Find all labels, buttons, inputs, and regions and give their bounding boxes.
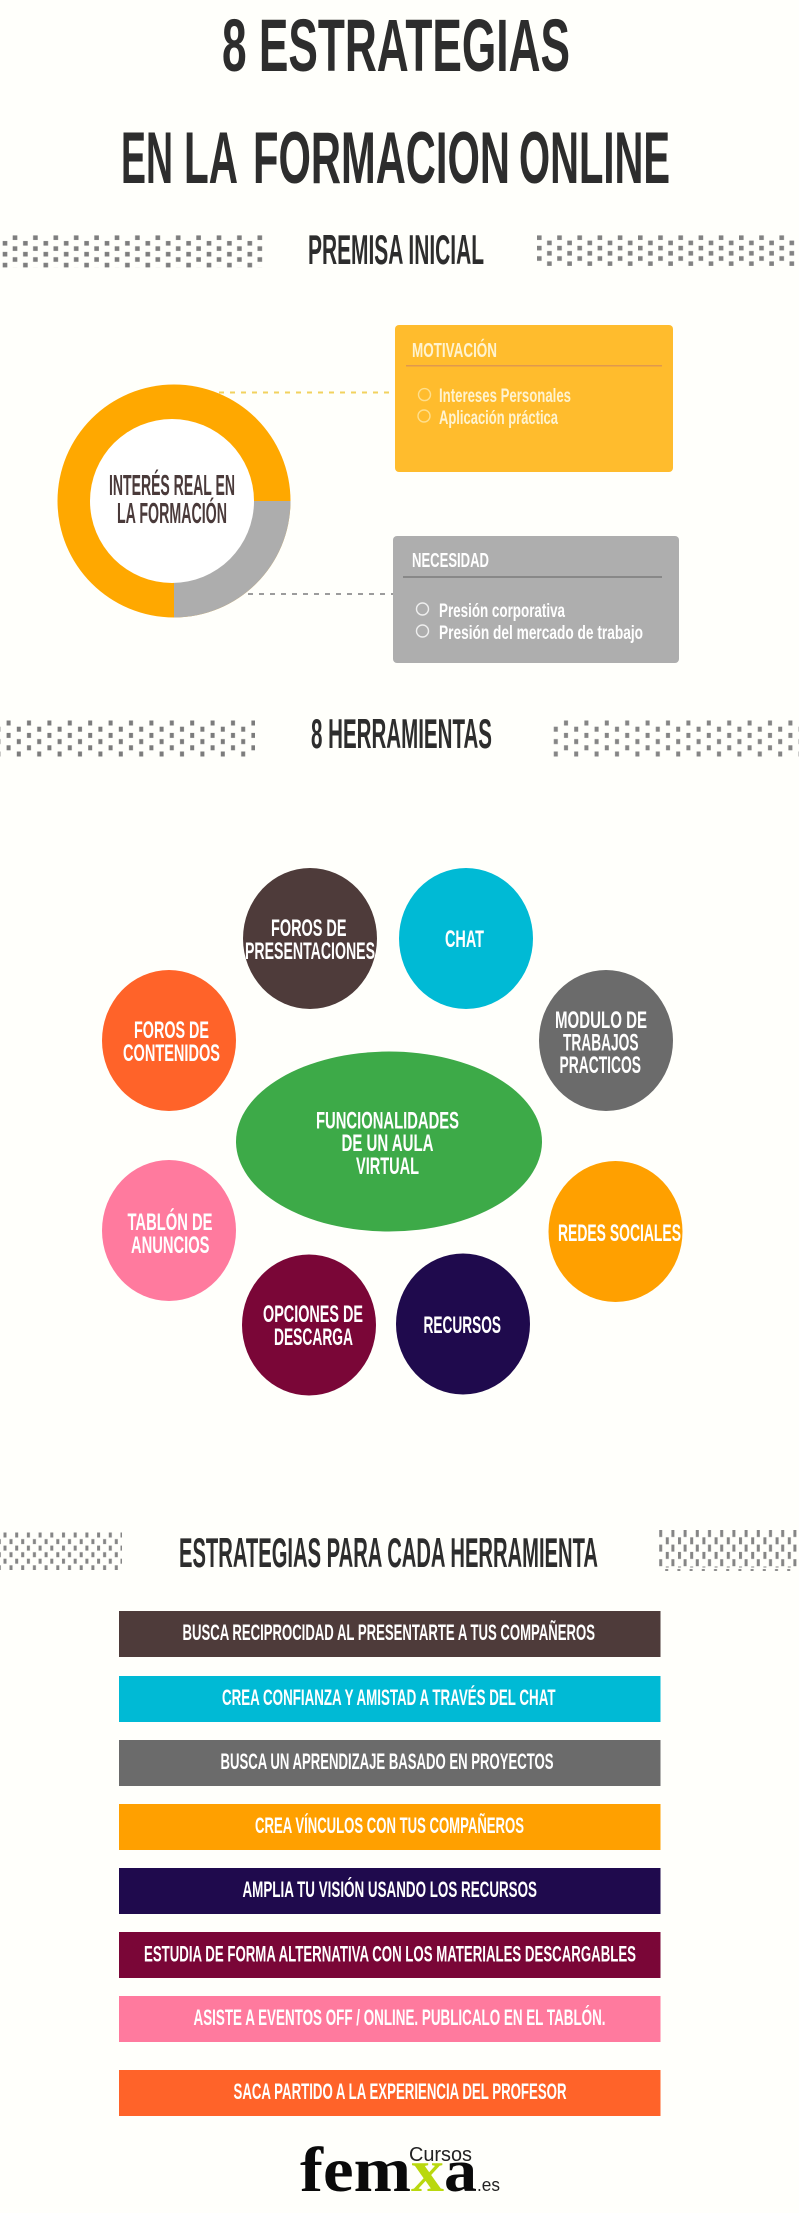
panel: necesidad: Presión del mercado de trabajo: [439, 623, 643, 644]
strategy bar: foros de contenidos: [119, 2070, 660, 2116]
node: foros de presentaciones: FOROS DE: [271, 915, 346, 942]
node: funcionalidades de un aula virtual: VIRTUAL: [356, 1153, 419, 1180]
title: 8 ESTRATEGIAS: [222, 4, 570, 87]
dotted band: premisa left: [0, 235, 264, 268]
dotted band: estrategias right: [659, 1530, 799, 1571]
panel: motivación: MOTIVACIÓN: [412, 338, 497, 362]
node: modulo de trabajos practicos: TRABAJOS: [563, 1030, 638, 1056]
panel: motivación: Intereses Personales: [439, 386, 571, 407]
connector: motivación: [219, 392, 395, 394]
node: foros de presentaciones: [243, 868, 377, 1009]
node: foros de contenidos: FOROS DE: [134, 1017, 209, 1044]
node: funcionalidades de un aula virtual: DE UN AULA: [342, 1130, 434, 1157]
node: modulo de trabajos practicos: PRACTICOS: [560, 1052, 641, 1079]
title: ONLINE: [519, 118, 670, 199]
panel: necesidad: [393, 536, 679, 663]
dotted band: premisa right: [537, 235, 799, 266]
text: 8 HERRAMIENTAS: [311, 710, 492, 757]
node: foros de presentaciones: PRESENTACIONES: [245, 938, 375, 965]
logo: cursos femxa: Cursos: [409, 2144, 472, 2166]
node: opciones de descarga: [242, 1254, 376, 1396]
strategy bar: trabajos practicos: [119, 1740, 660, 1786]
strategy bar: chat: [119, 1676, 660, 1722]
logo: cursos femxa: [300, 2134, 500, 2205]
connector: necesidad: [248, 593, 393, 595]
node: modulo de trabajos practicos: [539, 970, 673, 1111]
node: recursos: RECURSOS: [424, 1312, 501, 1339]
dotted band: estrategias left: [0, 1532, 122, 1570]
node: redes sociales: REDES SOCIALES: [558, 1220, 681, 1247]
node: funcionalidades de un aula virtual: [236, 1052, 542, 1232]
node: tablón de anuncios: ANUNCIOS: [131, 1232, 210, 1259]
node: foros de contenidos: [102, 970, 236, 1111]
strategy bar: recursos: [119, 1868, 660, 1914]
title: LA: [184, 118, 238, 199]
node: chat: CHAT: [445, 926, 484, 953]
strategy bar: redes sociales: CREA VÍNCULOS CON TUS COMPAÑEROS: [255, 1813, 524, 1838]
node: funcionalidades de un aula virtual: FUNCIONALIDADES: [316, 1108, 459, 1134]
donut chart: interés real en la formación: LA FORMACIÓN: [117, 496, 227, 530]
strategy bar: foros de presentaciones: [119, 1611, 660, 1657]
logo: cursos femxa: a: [444, 2138, 477, 2204]
strategy bar: chat: CREA CONFIANZA Y AMISTAD A TRAVÉS DEL CHAT: [222, 1685, 556, 1710]
logo: cursos femxa: fem: [300, 2134, 411, 2205]
title: [121, 4, 670, 199]
node: opciones de descarga: OPCIONES DE: [263, 1301, 363, 1328]
strategy bar: tablón de anuncios: [119, 1996, 660, 2042]
panel: necesidad: Presión corporativa: [439, 601, 565, 622]
text: PREMISA INICIAL: [308, 226, 484, 273]
panel: motivación: Aplicación práctica: [439, 408, 558, 429]
strategy bar: redes sociales: [119, 1804, 660, 1850]
dotted band: herramientas right: [548, 720, 799, 757]
logo: cursos femxa: x: [411, 2138, 444, 2204]
title: FORMACION: [253, 118, 510, 199]
strategy bar: recursos: AMPLIA TU VISIÓN USANDO LOS RECURSOS: [242, 1877, 537, 1902]
node: tablón de anuncios: TABLÓN DE: [128, 1208, 212, 1236]
node: chat: [399, 868, 533, 1009]
donut chart: interés real en la formación: INTERÉS REAL EN: [109, 468, 235, 502]
node: recursos: [396, 1254, 530, 1394]
panel: motivación: [395, 325, 673, 472]
node: redes sociales: [548, 1161, 682, 1302]
donut chart: interés real en la formación: [58, 384, 290, 618]
strategy bar: foros de contenidos: SACA PARTIDO A LA EXPERIENCIA DEL PROFESOR: [234, 2079, 567, 2104]
title: EN: [121, 118, 173, 199]
dotted band: herramientas left: [0, 720, 255, 757]
node: opciones de descarga: DESCARGA: [274, 1324, 353, 1351]
logo: cursos femxa: .es: [477, 2175, 500, 2195]
node: modulo de trabajos practicos: MODULO DE: [555, 1007, 647, 1034]
node: tablón de anuncios: [102, 1160, 236, 1301]
strategy bar: opciones de descarga: [119, 1932, 660, 1978]
panel: necesidad: NECESIDAD: [412, 550, 489, 572]
strategy bar: trabajos practicos: BUSCA UN APRENDIZAJE BASADO EN PROYECTOS: [220, 1749, 554, 1774]
node: foros de contenidos: CONTENIDOS: [123, 1040, 220, 1067]
